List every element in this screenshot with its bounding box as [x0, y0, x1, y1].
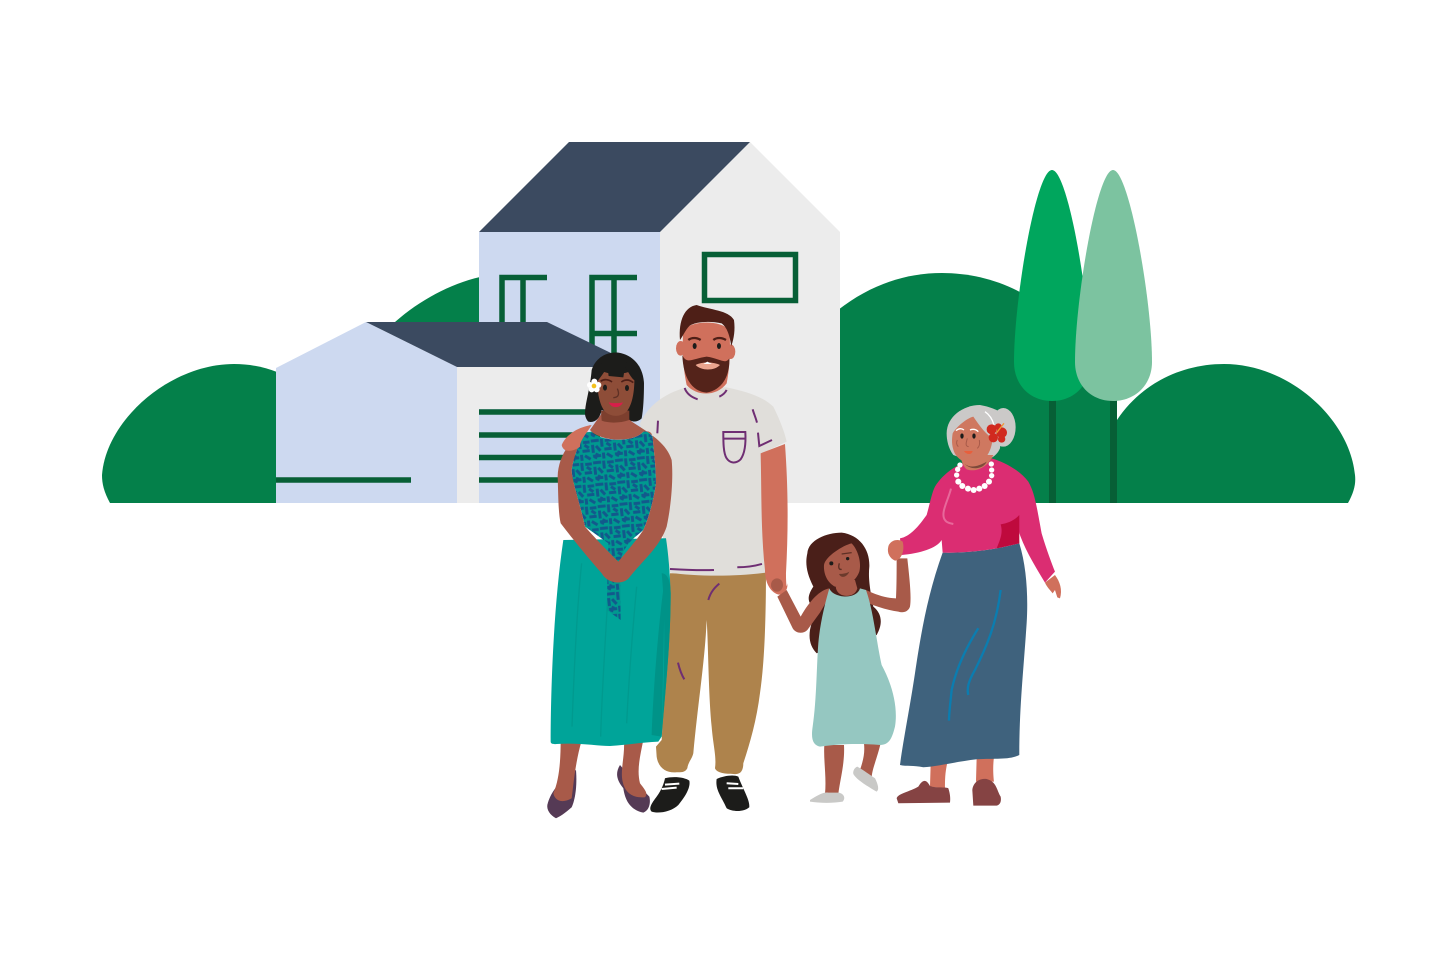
tree: light green: [1075, 170, 1152, 503]
girl: eyes, brow and smile: [829, 553, 852, 577]
grandmother: neck: [960, 455, 993, 470]
man: ears: [676, 341, 735, 359]
grandmother: right hand: [1045, 575, 1061, 598]
grandmother: face: [952, 417, 993, 464]
person: man: [640, 305, 788, 812]
girl: hand in man's hand: [771, 578, 783, 592]
grandmother: shoes: [897, 779, 1001, 806]
grandmother: neck shadow: [965, 462, 987, 468]
man: mouth: [696, 362, 720, 369]
woman: skirt folds: [652, 573, 671, 737]
girl: neck and face: [824, 543, 860, 596]
woman: long skirt: [551, 538, 671, 746]
grandmother: skirt lines: [949, 590, 1001, 721]
girl: shoes: [810, 767, 878, 803]
girl: dress: [812, 588, 896, 747]
girl: legs: [824, 743, 881, 794]
woman: neck and chest: [590, 413, 643, 440]
woman: legs: [553, 740, 646, 801]
woman: hand on shoulder (man's hand): [562, 425, 592, 451]
garage door lines: [276, 412, 600, 480]
woman: shoes: [547, 765, 650, 818]
person: grandmother: [888, 405, 1061, 806]
man: arm and hand: [761, 444, 788, 595]
man: shoes: [650, 776, 749, 812]
grandmother: hair: [947, 405, 1016, 463]
woman: flower: [587, 379, 601, 392]
garage: [276, 322, 640, 503]
grandmother: skirt: [900, 543, 1027, 767]
woman: patterned top: [572, 431, 656, 620]
grandmother: legs: [930, 757, 994, 788]
girl: arms: [777, 558, 911, 633]
grandmother: eyes, brows and mouth: [956, 412, 994, 454]
man: trousers: [656, 572, 766, 774]
grandmother: sweater: [900, 458, 1055, 583]
man: hair: [680, 305, 735, 346]
grandmother: hibiscus flower: [987, 423, 1007, 443]
person: woman in teal dress: [547, 352, 672, 818]
window: upper right: [704, 254, 796, 300]
man: beard: [682, 355, 729, 393]
grandmother: pearl necklace: [954, 461, 994, 493]
woman: face: [597, 370, 634, 416]
woman: neck shadow: [601, 411, 629, 423]
man: t-shirt: [640, 387, 787, 576]
woman: eyes, brows and lips: [601, 380, 633, 407]
grandmother: left hand (raised): [888, 540, 903, 561]
woman: hair: [585, 352, 644, 422]
man: shirt stitching: [657, 388, 772, 679]
main house: [479, 142, 840, 503]
girl: hair: [806, 533, 881, 653]
tree: dark green: [1014, 170, 1090, 503]
woman: fringe: [595, 360, 637, 383]
window: upper middle: [592, 278, 637, 360]
background hills: [102, 273, 1355, 503]
man: face: [683, 322, 730, 394]
person: girl: [771, 533, 911, 803]
woman: arms and clasped hands: [558, 422, 672, 583]
grandmother: sweater shading: [997, 515, 1019, 548]
man: eyes and brows: [693, 343, 721, 349]
window: upper left: [502, 278, 547, 322]
